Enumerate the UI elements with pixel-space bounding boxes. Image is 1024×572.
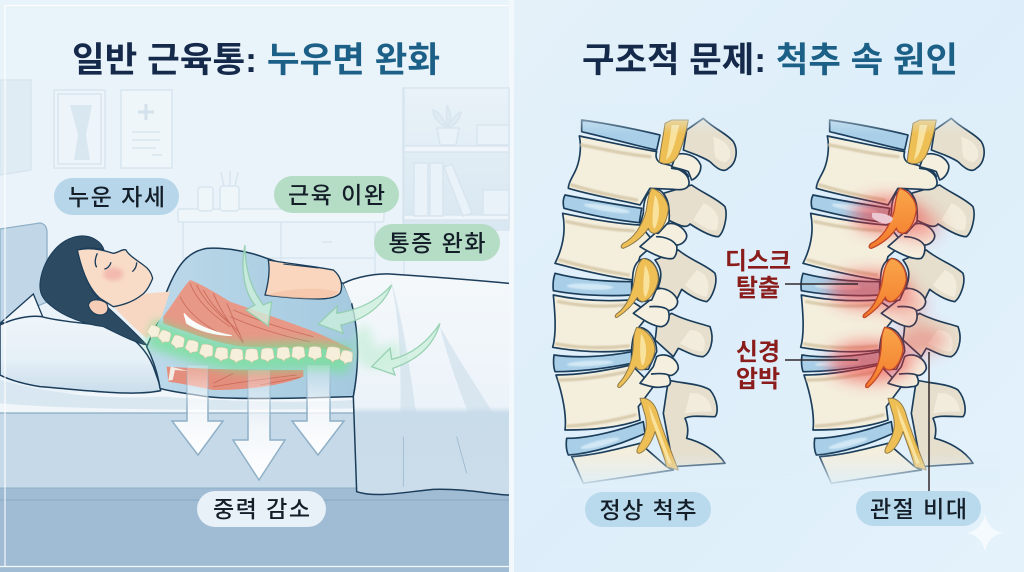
label: normal spine (585, 492, 711, 527)
title left: 일반 근육통: 누우면 완화 (72, 41, 440, 80)
bed shadow (0, 380, 353, 410)
panel frame lines (0, 5, 509, 566)
callout lines (785, 284, 929, 491)
spine vertebrae (145, 324, 354, 366)
green glow on blanket (358, 330, 400, 358)
compressed nerves (863, 188, 916, 388)
room backdrop (0, 80, 509, 300)
mattress (0, 390, 360, 413)
herniated disc bulge (872, 213, 893, 223)
label: joint hypertrophy (856, 491, 981, 526)
bed base (0, 413, 360, 488)
hair (40, 236, 147, 345)
label: disc herniation (725, 248, 791, 302)
gravity arrows (172, 365, 344, 480)
label: muscle relaxation (274, 176, 399, 213)
person and pillow drawn on a traced scale (0, 236, 509, 495)
label: reduced gravity (197, 491, 326, 527)
ear (88, 300, 108, 315)
shirt torso (147, 248, 359, 399)
neck (113, 292, 170, 338)
floor (0, 488, 509, 572)
blanket folds (390, 277, 493, 447)
label: nerve compression: 압박 (736, 366, 780, 393)
label: muscle relaxation: 근육 이완 (288, 182, 385, 208)
headboard (0, 223, 47, 322)
relief arrows (243, 245, 440, 375)
label: pain relief: 통증 완화 (388, 230, 486, 256)
panel: structural problem (514, 0, 1024, 572)
arm (265, 260, 342, 299)
face (77, 249, 153, 307)
pillow (0, 316, 161, 393)
closed eye and mouth (95, 253, 137, 272)
muscles lower (167, 367, 303, 390)
label: lying posture (54, 178, 179, 215)
back pillow (0, 294, 43, 323)
fade of spine ends (560, 104, 1000, 488)
cheek (103, 267, 123, 281)
label: pain relief (374, 224, 500, 261)
label: normal spine: 정상 척추 (600, 497, 696, 523)
normal spine (553, 118, 736, 483)
icon: sparkle (967, 514, 1003, 552)
panel background right (514, 0, 1024, 572)
label: disc herniation: 탈출 (736, 275, 780, 302)
panel background left (0, 0, 509, 572)
label: disc herniation: 디스크 (725, 248, 791, 275)
label: joint hypertrophy: 관절 비대 (870, 496, 967, 522)
blanket outline (343, 274, 509, 495)
label: lying posture: 누운 자세 (68, 184, 165, 210)
label: nerve compression: 신경 (736, 339, 780, 366)
title right: 구조적 문제: 척추 속 원인 (582, 41, 958, 80)
inflammation glow (828, 197, 946, 382)
affected spine (801, 118, 984, 483)
label: reduced gravity: 중력 감소 (213, 496, 310, 522)
blanket (343, 274, 509, 495)
panel: general muscle pain (0, 0, 509, 572)
muscles upper (163, 280, 353, 350)
label: nerve compression (736, 339, 780, 393)
spine glow (150, 333, 350, 360)
